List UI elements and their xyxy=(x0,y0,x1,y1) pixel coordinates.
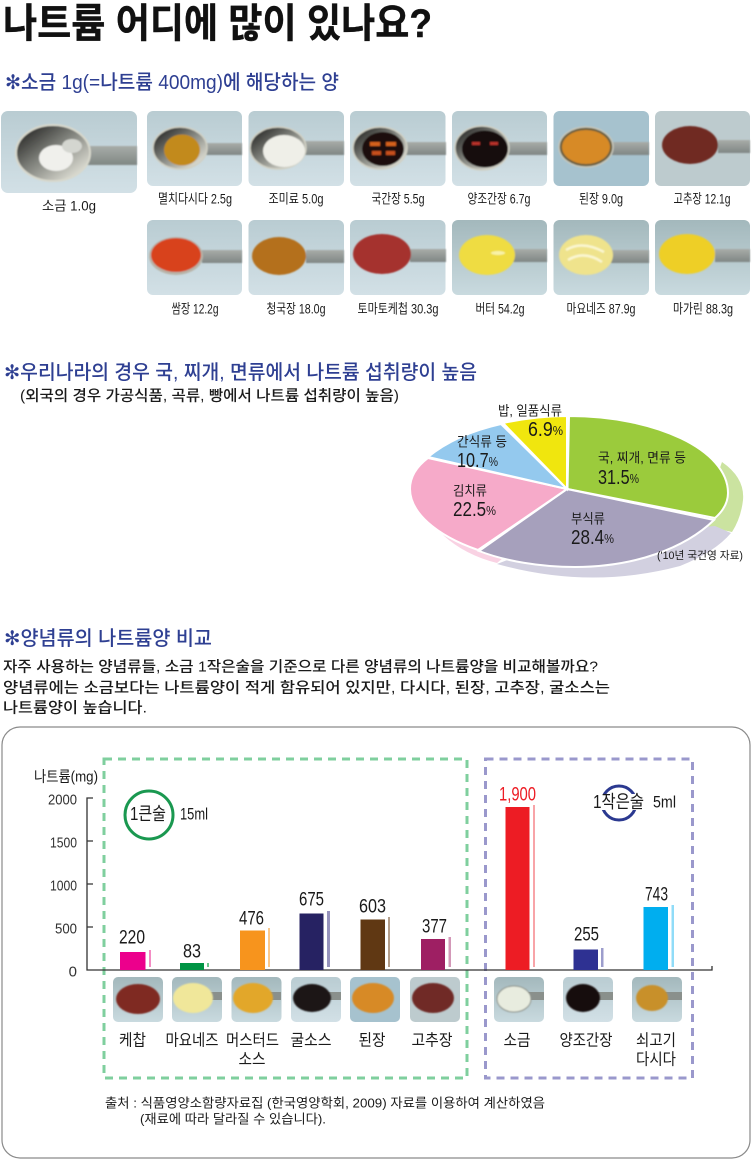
item: beef dashida xyxy=(632,977,682,1068)
pie label: snacks xyxy=(457,434,507,472)
pie label: rice xyxy=(498,404,563,441)
pie label: snacks: 간식류 등 xyxy=(457,434,507,450)
intro paragraph: 양념류에는 소금보다는 나트륨양이 적게 함유되어 있지만, 다시다, 된장, 고추장, 굴소스는 xyxy=(3,680,610,696)
spoon: ssamjang 12.2g xyxy=(147,220,242,316)
bar: ketchup 220 xyxy=(119,928,151,970)
heading: korean sodium sources: ✻우리나라의 경우 국, 찌개, 면류에서 나트륨 섭취량이 높음 xyxy=(4,361,477,384)
spoon: tomato ketchup 30.3g xyxy=(350,220,446,316)
axes: 0 xyxy=(69,964,77,980)
spoon: mayonnaise 87.9g xyxy=(554,220,649,316)
spoon: margarine 88.3g: 마가린 88.3g xyxy=(673,302,733,316)
bar: salt 1,900 xyxy=(499,784,536,970)
pie slice: rice 6.9% xyxy=(503,416,567,489)
axes: 500 xyxy=(55,920,77,938)
bar: beef dashida 743: 743 xyxy=(645,884,668,906)
axes xyxy=(48,792,712,980)
legend: 1 teaspoon: 1작은술 xyxy=(593,792,644,812)
spoon: cheonggukjang 18.0g xyxy=(248,220,344,316)
pie slice: kimchi 22.5% xyxy=(410,458,567,550)
bar: gochujang 377 xyxy=(421,916,451,970)
spoon: soup soy sauce 5.5g: 국간장 5.5g xyxy=(372,192,424,206)
spoon: brewed soy sauce 6.7g xyxy=(452,111,547,206)
bar: salt 1,900: 1,900 xyxy=(499,784,536,806)
spoon: mayonnaise 87.9g: 마요네즈 87.9g xyxy=(566,302,636,316)
pie label: rice: 밥, 일품식류 xyxy=(498,404,562,418)
legend: 1 tablespoon: 1큰술 xyxy=(130,804,166,824)
spoon: seasoning 5.0g: 조미료 5.0g xyxy=(268,192,324,206)
spoon: doenjang 9.0g xyxy=(554,111,649,206)
item: oyster sauce: 굴소스 xyxy=(290,1032,332,1050)
bar: mayonnaise 83: 83 xyxy=(183,942,201,962)
spoon: gochujang 12.1g xyxy=(655,111,750,206)
pie slice: side dishes 28.4% xyxy=(479,489,714,567)
spoon: salt 1.0g: 소금 1.0g xyxy=(42,198,96,214)
pie label: soups xyxy=(598,450,686,489)
item: salt xyxy=(494,977,544,1050)
item: mustard sauce: 소스 xyxy=(238,1052,266,1068)
source note: (재료에 따라 달라질 수 있습니다). xyxy=(140,1112,326,1126)
axes: 2000 xyxy=(48,792,77,808)
intro paragraph xyxy=(3,658,610,716)
pie label: rice: 6.9% xyxy=(528,419,563,441)
pie label: side dishes: 28.4% xyxy=(571,527,614,549)
source note xyxy=(105,1096,545,1126)
item: ketchup: 케찹 xyxy=(119,1032,146,1050)
bar: mustard sauce 476: 476 xyxy=(239,908,264,930)
item: gochujang xyxy=(410,977,460,1050)
item: brewed soy sauce: 양조간장 xyxy=(560,1032,613,1050)
spoon: anchovy dashida 2.5g xyxy=(147,111,242,206)
spoon: tomato ketchup 30.3g: 토마토케첩 30.3g xyxy=(358,302,438,316)
spoon: salt 1.0g xyxy=(1,111,137,214)
spoon: cheonggukjang 18.0g: 청국장 18.0g xyxy=(266,302,326,316)
bar: oyster sauce 675 xyxy=(299,890,330,970)
item: beef dashida: 다시다 xyxy=(636,1050,676,1068)
spoon: seasoning 5.0g xyxy=(248,111,344,206)
pie label: side dishes xyxy=(571,512,614,549)
pie label: kimchi: 22.5% xyxy=(453,499,496,521)
panel: spoon photos xyxy=(1,111,750,316)
subheading: foreign sources: (외국의 경우 가공식품, 곡류, 빵에서 나트륨 섭취량이 높음) xyxy=(20,388,399,404)
item: mustard sauce xyxy=(226,977,282,1068)
bar: doenjang 603: 603 xyxy=(359,896,386,918)
intro paragraph: 나트륨양이 높습니다. xyxy=(3,700,147,716)
dashed box: tablespoon group xyxy=(104,759,467,1078)
item: beef dashida: 쇠고기 xyxy=(636,1032,676,1050)
item: doenjang xyxy=(350,977,400,1050)
legend: 1 teaspoon xyxy=(593,786,676,820)
legend: 1 tablespoon xyxy=(125,791,208,839)
item: salt: 소금 xyxy=(504,1032,530,1050)
pie label: snacks: 10.7% xyxy=(457,450,498,472)
heading: salt equivalent: ✻소금 1g(=나트륨 400mg)에 해당하는 양 xyxy=(5,71,339,94)
item: oyster sauce xyxy=(290,977,341,1050)
dashed box: teaspoon group xyxy=(486,759,692,1078)
item: mayonnaise xyxy=(166,977,222,1050)
bar: brewed soy sauce 255: 255 xyxy=(574,924,599,946)
pie label: soups: 국, 찌개, 면류 등 xyxy=(598,450,686,466)
bar: oyster sauce 675: 675 xyxy=(299,890,324,910)
panel: bar chart card xyxy=(2,727,750,1158)
title: 나트륨 어디에 많이 있나요? xyxy=(3,2,432,46)
bar: mayonnaise 83 xyxy=(180,942,209,970)
axes: 1500 xyxy=(50,834,77,852)
item: ketchup xyxy=(113,977,163,1050)
pie chart: sodium intake by food group xyxy=(410,404,743,578)
spoon: anchovy dashida 2.5g: 멸치다시다 2.5g xyxy=(158,192,232,206)
item: mayonnaise: 마요네즈 xyxy=(166,1032,218,1050)
bar: mustard sauce 476 xyxy=(239,908,270,970)
spoon: margarine 88.3g xyxy=(655,220,750,316)
item: doenjang: 된장 xyxy=(358,1032,386,1050)
spoon: gochujang 12.1g: 고추장 12.1g xyxy=(674,192,730,206)
y axis title: 나트륨(mg) xyxy=(34,768,98,786)
axes: 1000 xyxy=(50,878,77,894)
item: brewed soy sauce xyxy=(560,977,613,1050)
intro paragraph: 자주 사용하는 양념류들, 소금 1작은술을 기준으로 다른 양념류의 나트륨양을 비교해볼까요? xyxy=(3,658,598,676)
bar: brewed soy sauce 255 xyxy=(574,924,604,970)
source note: 출처 : 식품영양소함량자료집 (한국영양학회, 2009) 자료를 이용하여 계산하였음 xyxy=(105,1096,545,1110)
pie label: soups: 31.5% xyxy=(598,467,639,489)
legend: 1 teaspoon: 5ml xyxy=(653,792,676,812)
item: mustard sauce: 머스터드 xyxy=(226,1032,279,1050)
pie slice: snacks 10.7% xyxy=(428,424,567,489)
pie label: kimchi: 김치류 xyxy=(453,484,487,498)
spoon: soup soy sauce 5.5g xyxy=(350,111,446,206)
pie label: side dishes: 부식류 xyxy=(571,512,605,526)
spoon: doenjang 9.0g: 된장 9.0g xyxy=(579,192,623,206)
heading: seasoning comparison: ✻양념류의 나트륨양 비교 xyxy=(4,627,212,650)
spoon: ssamjang 12.2g: 쌈장 12.2g xyxy=(172,302,218,316)
bar: beef dashida 743 xyxy=(644,884,674,970)
pie label: kimchi xyxy=(453,484,496,521)
bar: doenjang 603 xyxy=(359,896,390,970)
pie slice: soups 31.5% xyxy=(568,416,728,518)
bar: gochujang 377: 377 xyxy=(422,916,447,938)
item: gochujang: 고추장 xyxy=(412,1032,453,1050)
spoon: butter 54.2g: 버터 54.2g xyxy=(476,302,524,316)
legend: 1 tablespoon: 15ml xyxy=(180,804,208,824)
spoon: butter 54.2g xyxy=(452,220,547,316)
bar: ketchup 220: 220 xyxy=(119,928,145,948)
pie source note: ('10년 국건영 자료) xyxy=(657,549,743,562)
spoon: brewed soy sauce 6.7g: 양조간장 6.7g xyxy=(468,192,530,206)
